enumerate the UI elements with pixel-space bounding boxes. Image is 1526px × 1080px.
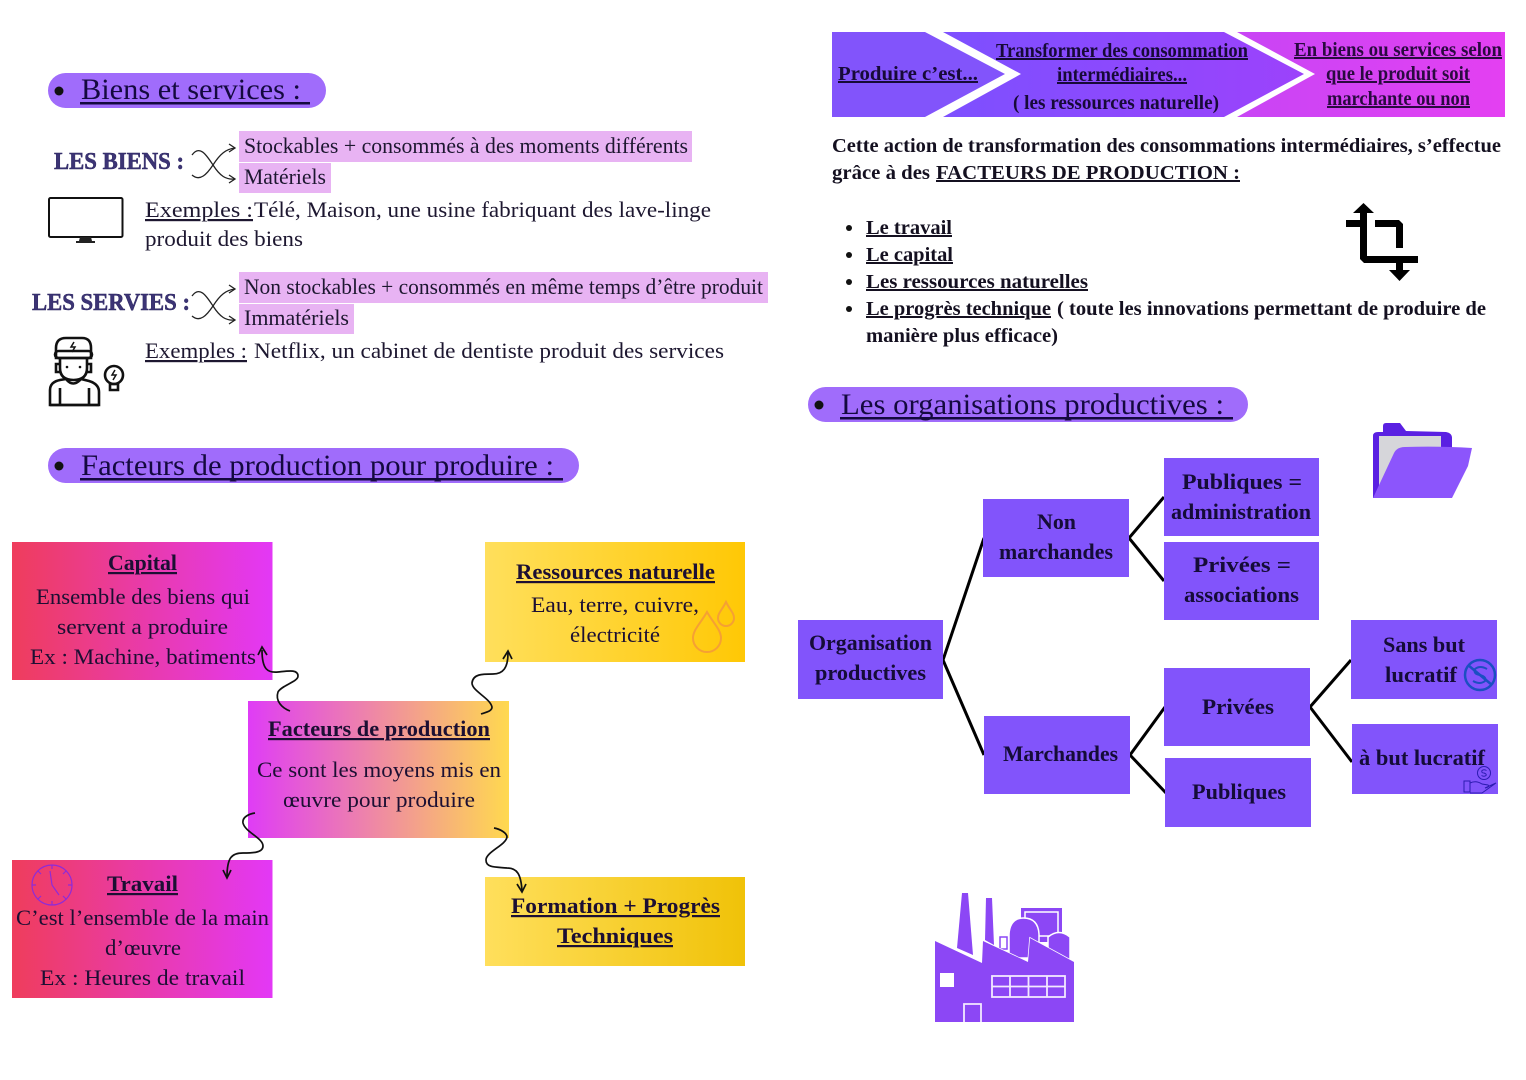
text: exemples biens: Télé, Maison, une usine fabriquant des lave-linge (254, 197, 711, 222)
list: facteurs de production: Le capital (866, 244, 953, 266)
icon: crossing arrows biens (192, 144, 235, 183)
box: non marchandes: marchandes (999, 539, 1113, 564)
icon: television (49, 198, 122, 243)
icon: factory (935, 893, 1074, 1022)
text: exemples biens: Exemples : (145, 197, 253, 222)
list: facteurs de production: Le progrès technique (866, 298, 1051, 320)
box: publiques administration: Publiques = (1182, 469, 1302, 494)
label: les servies: LES SERVIES : (32, 290, 190, 316)
box: publiques administration (1164, 458, 1319, 536)
box: marchandes (984, 716, 1130, 794)
chevron: transformer: ( les ressources naturelle) (1013, 92, 1219, 114)
box: publiques (1165, 758, 1311, 827)
box: sans but lucratif: Sans but (1383, 632, 1466, 657)
box: à but lucratif (1352, 724, 1498, 794)
chevron: transformer: intermédiaires... (1057, 64, 1187, 86)
panel: travail: C’est l’ensemble de la main (16, 905, 269, 930)
panel: facteurs de production: œuvre pour produire (283, 787, 475, 812)
panel: capital: Ensemble des biens qui (36, 584, 250, 609)
text: action de transformation: FACTEURS DE PRODUCTION : (936, 162, 1240, 184)
highlight: immatériels: Immatériels (244, 305, 349, 330)
arrow: facteurs to travail (223, 813, 263, 878)
chevron: en biens ou services: que le produit soit (1326, 63, 1470, 85)
text: action de transformation: Cette action de transformation des consommations intermédiaires, s’effectue (832, 135, 1501, 157)
panel: travail (12, 860, 272, 998)
chevron: produire c'est: Produire c’est... (838, 63, 978, 85)
text: exemples biens (145, 197, 711, 251)
arrow: facteurs to capital (258, 647, 298, 711)
chevron: transformer: Transformer des consommation (996, 40, 1248, 62)
chevron: en biens ou services: marchante ou non (1327, 88, 1470, 110)
list: facteurs de production: manière plus efficace) (866, 325, 1058, 347)
box: organisation productives: productives (815, 660, 926, 685)
box: sans but lucratif (1351, 620, 1497, 699)
box: privées: Privées (1202, 694, 1274, 719)
list: facteurs de production: Les ressources naturelles (866, 271, 1088, 293)
list: facteurs de production: ( toute les innovations permettant de produire de (1057, 298, 1486, 320)
box: privées associations: Privées = (1193, 552, 1291, 577)
panel: formation et progrès techniques: Formation + Progrès (511, 893, 720, 918)
panel: travail: Ex : Heures de travail (40, 965, 245, 990)
icon: water drops (693, 602, 734, 652)
text: action de transformation: grâce à des (832, 162, 930, 184)
panel: capital (12, 542, 272, 680)
connector lines (943, 497, 1352, 793)
box: organisation productives: Organisation (809, 630, 932, 655)
highlight: non stockables: Non stockables + consommés en même temps d’être produit (244, 274, 763, 299)
panel: ressources naturelle: Eau, terre, cuivre, (531, 592, 699, 617)
list: facteurs de production: Le travail (866, 217, 952, 239)
box: à but lucratif: à but lucratif (1359, 745, 1486, 770)
heading: Biens et services: Biens et services : (81, 73, 301, 106)
icon: crossing arrows services (192, 285, 235, 324)
box: sans but lucratif: lucratif (1385, 662, 1458, 687)
arrow: facteurs to formation (486, 828, 526, 892)
icon: hand with coin (1464, 766, 1496, 793)
arrow: facteurs to ressources (472, 651, 512, 714)
icon: no dollar (1465, 660, 1495, 690)
icon: worker with light bulb (50, 338, 123, 405)
box: publiques administration: administration (1171, 499, 1311, 524)
text: exemples services: Netflix, un cabinet de dentiste produit des services (254, 338, 724, 363)
panel: travail: d’œuvre (105, 935, 181, 960)
panel: travail: Travail (107, 871, 178, 896)
section: les biens (49, 131, 711, 251)
box: privées associations (1164, 542, 1319, 620)
box: marchandes: Marchandes (1003, 741, 1118, 766)
box: privées associations: associations (1184, 582, 1299, 607)
chevron: en biens ou services (1237, 32, 1505, 117)
panel: formation et progrès techniques (485, 877, 745, 966)
box: privées (1164, 668, 1310, 746)
panel: ressources naturelle: Ressources naturelle (516, 559, 715, 584)
icon: crop arrows (1346, 203, 1418, 281)
list: facteurs de production (846, 217, 1486, 347)
panel: capital: Ex : Machine, batiments (30, 644, 256, 669)
box: organisation productives (798, 620, 943, 699)
heading: Facteurs de production: Facteurs de production pour produire : (81, 449, 554, 482)
icon: clock (32, 865, 72, 905)
chevron: en biens ou services: En biens ou services selon (1294, 39, 1502, 61)
panel: ressources naturelle (485, 542, 745, 662)
label: les biens: LES BIENS : (54, 149, 184, 175)
panel: facteurs de production: Ce sont les moyens mis en (257, 757, 501, 782)
text: exemples biens: produit des biens (145, 226, 303, 251)
section: les services (32, 272, 768, 405)
text: action de transformation (832, 135, 1501, 184)
icon: folder (1373, 423, 1472, 498)
chevron flow: produire (832, 32, 1505, 117)
highlight: stockables: Stockables + consommés à des moments différents (244, 133, 688, 158)
text: exemples services: Exemples : (145, 338, 247, 363)
chevron: transformer (943, 32, 1304, 117)
highlight: matériels: Matériels (244, 164, 326, 189)
org chart (798, 458, 1498, 827)
box: publiques: Publiques (1192, 779, 1286, 804)
chevron: produire c'est (832, 32, 1005, 117)
panel: facteurs de production (248, 701, 509, 838)
panel: ressources naturelle: électricité (570, 622, 660, 647)
panel: capital: servent a produire (57, 614, 228, 639)
box: non marchandes (983, 499, 1129, 577)
box: non marchandes: Non (1037, 509, 1076, 534)
heading: Les organisations productives: Les organisations productives : (841, 388, 1224, 421)
panel: facteurs de production: Facteurs de production (268, 716, 490, 741)
panel: capital: Capital (108, 550, 177, 575)
panel: formation et progrès techniques: Techniques (557, 923, 673, 948)
